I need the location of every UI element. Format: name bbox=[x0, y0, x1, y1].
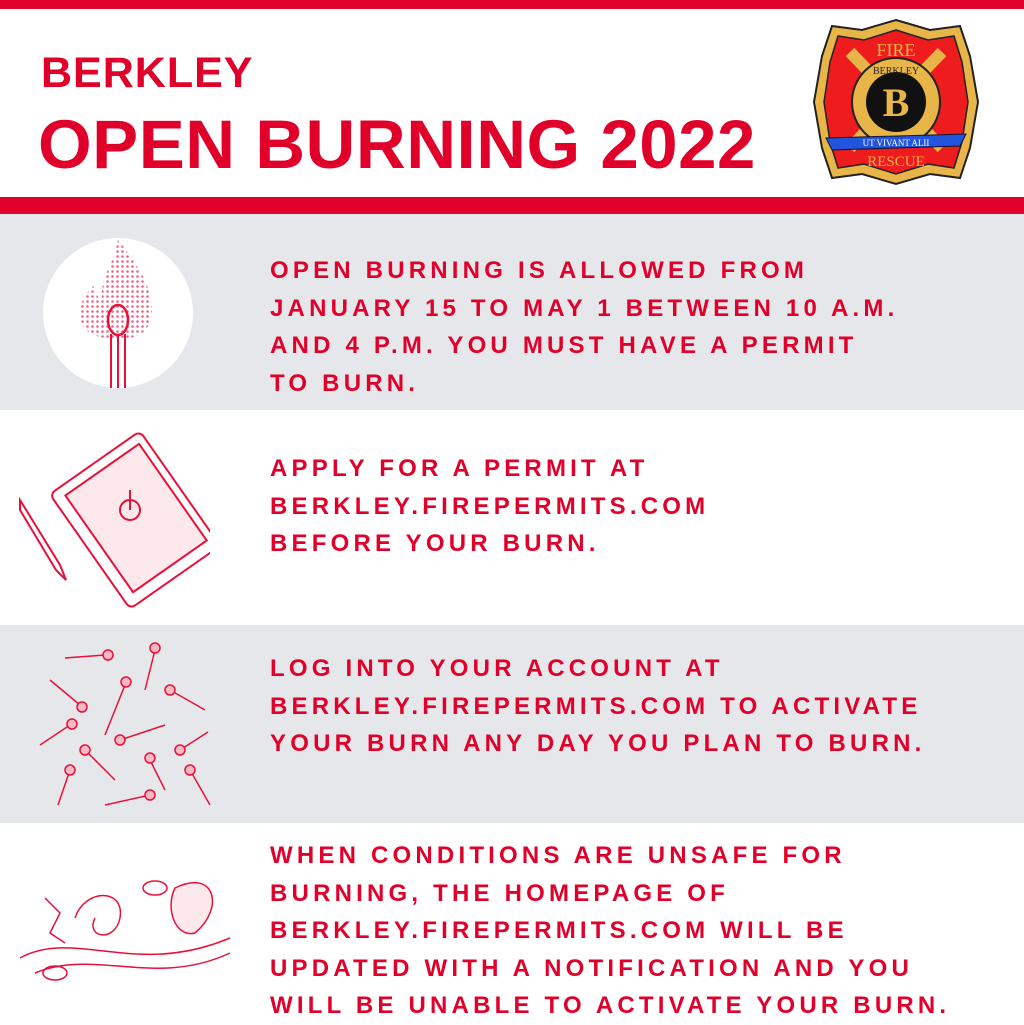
panel: apply bbox=[0, 410, 1024, 625]
text: dates: JANUARY 15 TO MAY 1 BETWEEN 10 A.M. bbox=[270, 295, 898, 322]
text: dates: TO BURN. bbox=[270, 370, 419, 397]
panel: burning allowed bbox=[0, 214, 1024, 410]
logo: fire department badge: BERKLEY bbox=[873, 66, 919, 77]
text: apply: APPLY FOR A PERMIT AT bbox=[270, 455, 648, 482]
text: unsafe: BURNING, THE HOMEPAGE OF bbox=[270, 880, 729, 907]
text: unsafe: UPDATED WITH A NOTIFICATION AND YOU bbox=[270, 955, 913, 982]
text: dates: OPEN BURNING IS ALLOWED FROM bbox=[270, 257, 808, 284]
icon: leaves in wind bbox=[20, 880, 230, 981]
title: berkley: BERKLEY bbox=[41, 49, 253, 97]
text: log in: BERKLEY.FIREPERMITS.COM TO ACTIVATE bbox=[270, 693, 921, 720]
text: log in: YOUR BURN ANY DAY YOU PLAN TO BURN. bbox=[270, 730, 926, 757]
title: open burning 2022: OPEN BURNING 2022 bbox=[38, 106, 756, 183]
text: unsafe: WILL BE UNABLE TO ACTIVATE YOUR BURN. bbox=[270, 992, 950, 1019]
text: dates: AND 4 P.M. YOU MUST HAVE A PERMIT bbox=[270, 332, 858, 359]
icon: scattered matches bbox=[40, 642, 211, 806]
logo: fire department badge: FIRE bbox=[876, 40, 916, 60]
text: apply bbox=[270, 455, 709, 557]
icon: clipboard and pen bbox=[19, 432, 210, 608]
logo: fire department badge: B bbox=[883, 80, 909, 125]
icon: match in circle bbox=[43, 238, 193, 388]
text: unsafe: WHEN CONDITIONS ARE UNSAFE FOR bbox=[270, 842, 846, 869]
logo: fire department badge bbox=[813, 19, 979, 185]
text: unsafe bbox=[270, 842, 950, 1019]
text: apply: BERKLEY.FIREPERMITS.COM bbox=[270, 493, 709, 520]
logo: fire department badge: UT VIVANT ALII bbox=[863, 138, 929, 148]
text: log in bbox=[270, 655, 926, 757]
text: dates bbox=[270, 257, 898, 397]
panel: unsafe conditions bbox=[0, 823, 1024, 1024]
text: log in: LOG INTO YOUR ACCOUNT AT bbox=[270, 655, 724, 682]
text: unsafe: BERKLEY.FIREPERMITS.COM WILL BE bbox=[270, 917, 848, 944]
logo: fire department badge: RESCUE bbox=[867, 154, 925, 170]
text: apply: BEFORE YOUR BURN. bbox=[270, 530, 600, 557]
panel: log in bbox=[0, 625, 1024, 823]
